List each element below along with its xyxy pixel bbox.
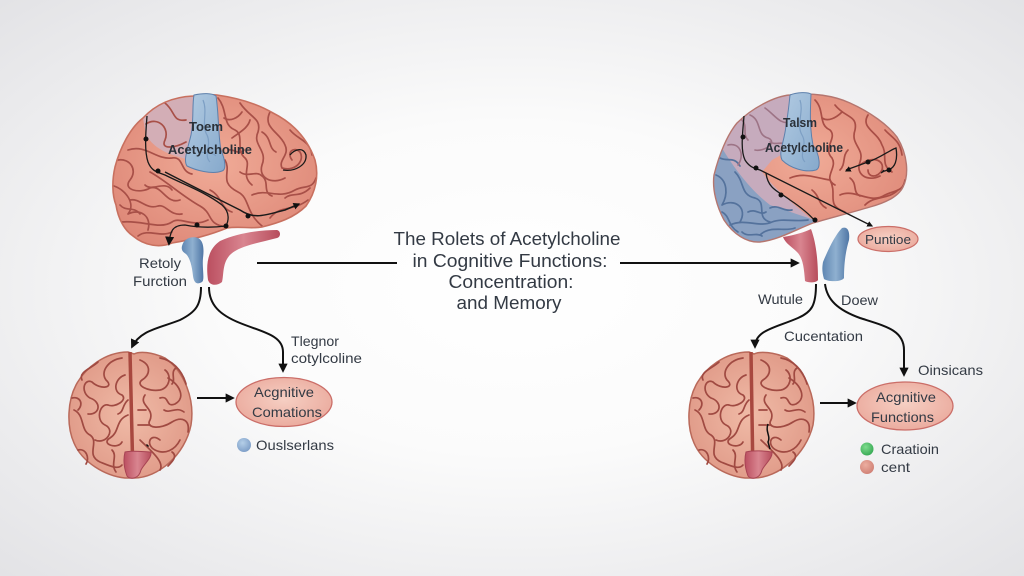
- title: and Memory: [456, 293, 562, 313]
- right stem labels: Doew: [841, 292, 879, 308]
- left brain labels: [168, 120, 252, 157]
- left oval: cognitive: Acgnitive: [254, 384, 314, 400]
- left label: tlegnor: [291, 333, 362, 366]
- right stem labels: Wutule: [758, 291, 803, 307]
- right oval: cognitive: Acgnitive: [876, 389, 936, 405]
- right oval: cognitive: [857, 382, 953, 430]
- right top-view brain: [689, 352, 814, 478]
- title: The Rolets of Acetylcholine: [394, 229, 620, 249]
- arrows: left stem branches: [132, 287, 283, 371]
- left brain labels: Acetylcholine: [168, 143, 252, 157]
- right legend: [860, 441, 939, 475]
- pathways: [146, 116, 306, 244]
- right stem labels: Oinsicans: [918, 362, 983, 378]
- title: in Cognitive Functions:: [412, 251, 608, 271]
- right brain labels: [765, 116, 843, 155]
- left stem label: Furction: [133, 273, 187, 289]
- left label: tlegnor: Tlegnor: [291, 333, 339, 349]
- arrow: title to right brain: [620, 262, 798, 264]
- right legend: cent: [881, 459, 910, 475]
- central blue stripe: [186, 94, 225, 172]
- right brain stem: [783, 228, 849, 282]
- title: [394, 229, 620, 313]
- left legend: Ouslserlans: [256, 437, 334, 453]
- right brain labels: Acetylcholine: [765, 141, 843, 155]
- title: Concentration:: [448, 272, 574, 292]
- left brain stem: [182, 230, 280, 285]
- left oval: cognitive: Comations: [252, 404, 322, 420]
- left oval: cognitive: [236, 378, 332, 426]
- pathways: [742, 116, 897, 226]
- left top-view brain: [69, 352, 192, 478]
- right stem labels: [758, 291, 983, 378]
- left brain labels: Toem: [189, 120, 223, 134]
- left label: tlegnor: cotylcoline: [291, 350, 362, 366]
- arrow: left brain to title: [257, 262, 397, 264]
- right oval: puntioe: Puntioe: [865, 232, 911, 247]
- arrow: left top brain to oval: [197, 397, 233, 399]
- left stem label: [133, 255, 187, 289]
- central blue stripe: [781, 93, 819, 171]
- right oval: cognitive: Functions: [871, 409, 934, 425]
- right side brain: [712, 92, 908, 243]
- left side brain: [112, 93, 318, 246]
- right legend: Craatioin: [881, 441, 939, 457]
- arrow: right top brain to oval: [820, 402, 855, 404]
- right stem labels: Cucentation: [784, 328, 863, 344]
- right brain labels: Talsm: [783, 116, 817, 130]
- left stem label: Retoly: [139, 255, 181, 271]
- right oval: puntioe: [858, 226, 918, 252]
- arrows: right stem branches: [755, 284, 904, 375]
